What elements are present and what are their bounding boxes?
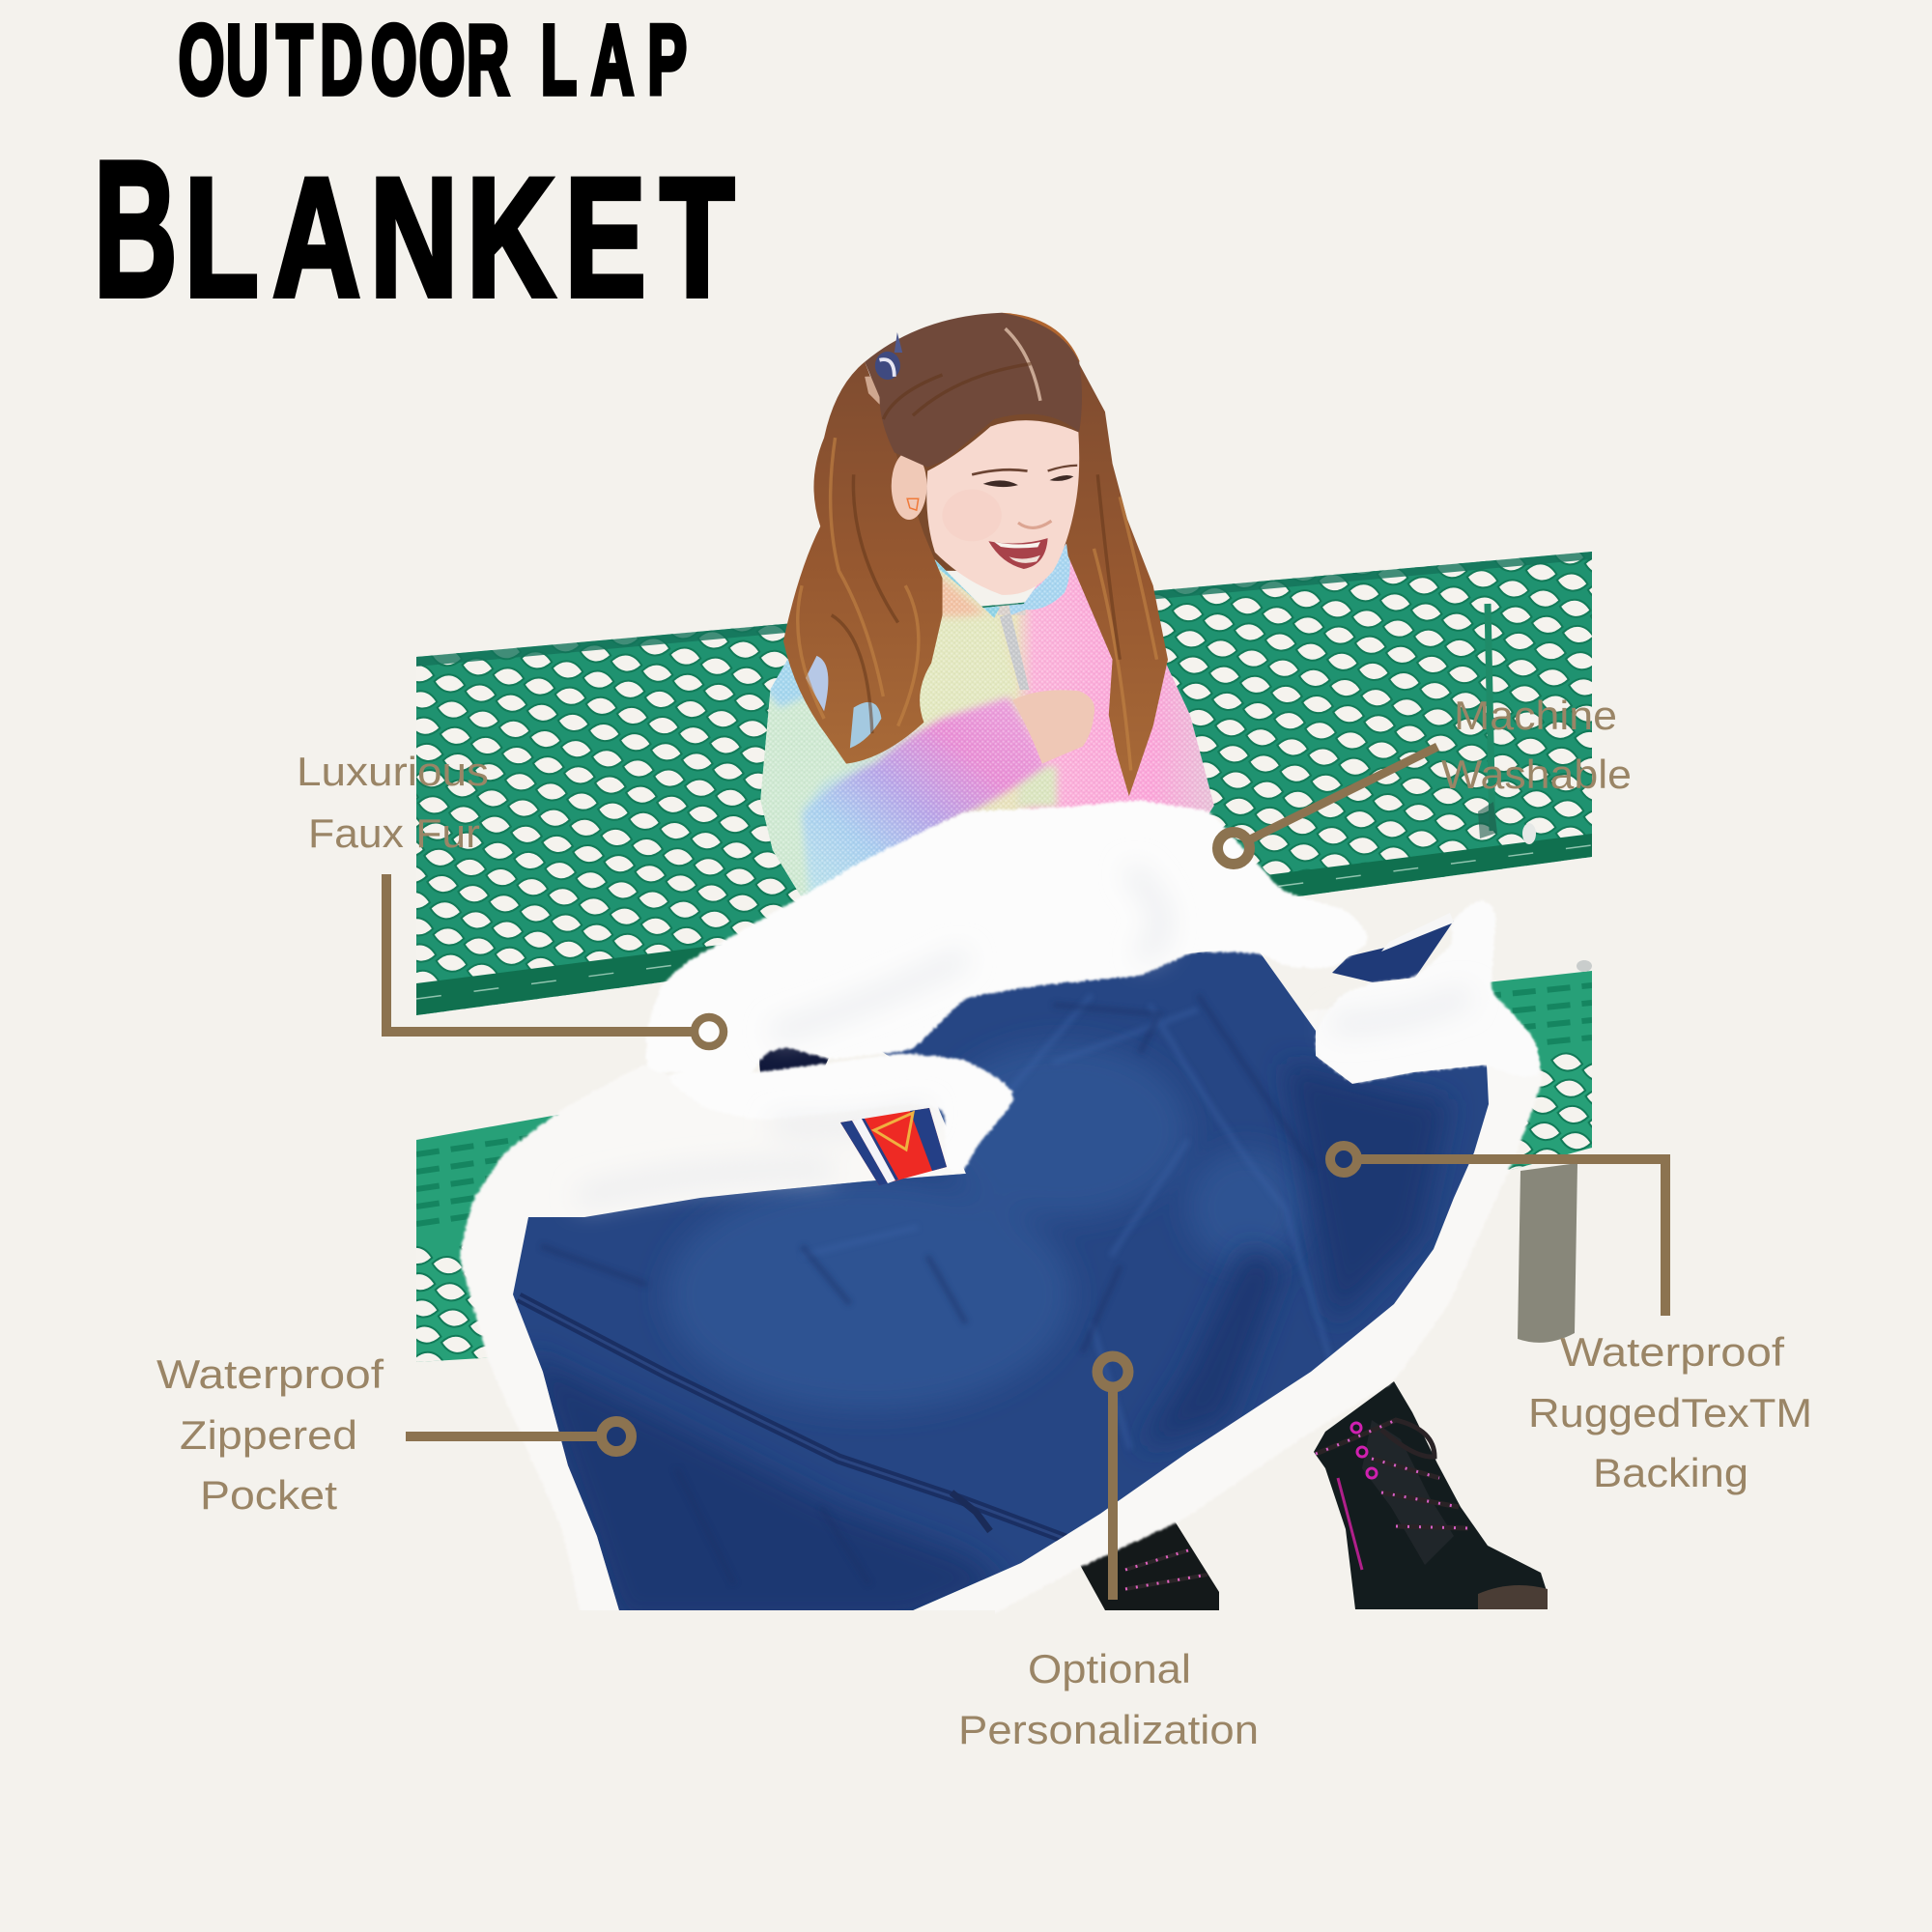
dark gap in fold <box>758 1043 829 1074</box>
title line: blanket: LANKET <box>185 144 734 332</box>
hair ponytail <box>783 362 943 764</box>
label: Zippered <box>180 1412 357 1458</box>
label <box>297 749 489 856</box>
collar peach panel <box>913 579 985 616</box>
title <box>94 5 734 336</box>
zippered pocket seam <box>519 1297 1065 1539</box>
jacket colour blends <box>751 579 1057 896</box>
callout: luxurious faux fur <box>297 749 724 1046</box>
label: Machine <box>1454 693 1617 738</box>
left boot <box>1080 1520 1219 1610</box>
upper arm blue <box>770 659 804 709</box>
label: Faux Fur <box>308 810 480 856</box>
label <box>1528 1329 1812 1495</box>
navy upper flap <box>1332 921 1454 982</box>
callout: waterproof zippered pocket <box>156 1351 632 1518</box>
under collar shirt <box>998 603 1026 615</box>
bench leg <box>1518 1163 1577 1343</box>
label: Luxurious <box>297 749 489 794</box>
hair tie <box>875 332 902 380</box>
label: Personalization <box>958 1707 1259 1752</box>
hand <box>1012 690 1094 764</box>
callout: waterproof ruggedtex backing <box>1330 1146 1812 1495</box>
label <box>156 1351 384 1518</box>
navy dark areas <box>526 1063 1449 1623</box>
label <box>1441 693 1632 797</box>
label: Optional <box>1028 1646 1191 1691</box>
hair top <box>865 313 1082 468</box>
leader line and ring <box>1097 1356 1128 1600</box>
boots <box>1080 1381 1548 1610</box>
crease shadows <box>543 997 1296 1350</box>
fur right fold <box>1316 896 1543 1084</box>
hair right side <box>1065 364 1168 796</box>
mask below blanket hem <box>570 1610 995 1626</box>
label: Washable <box>1441 752 1632 797</box>
pony skin gap <box>865 377 887 405</box>
face <box>926 420 1079 595</box>
hair part <box>1006 328 1040 401</box>
mouth <box>988 538 1048 569</box>
navy light areas <box>667 1043 1304 1410</box>
leader line and ring <box>406 1422 632 1451</box>
label <box>958 1646 1259 1752</box>
earring <box>907 498 919 510</box>
blue collar <box>1009 540 1070 615</box>
orange hair crown <box>1002 313 1080 362</box>
nose <box>1018 521 1051 527</box>
personalization tag <box>840 1108 947 1185</box>
callout: optional personalization <box>958 1356 1259 1752</box>
teal collar trim <box>935 556 1000 618</box>
navy backing <box>513 951 1489 1610</box>
jacket <box>751 534 1223 899</box>
bench with green mesh <box>416 313 1592 1604</box>
leader line and ring <box>1330 1146 1665 1316</box>
label: RuggedTexTM <box>1528 1390 1812 1435</box>
right boot <box>1314 1381 1548 1609</box>
hair base behind face <box>895 364 1079 571</box>
cheek blush <box>943 490 1002 541</box>
eyes <box>972 466 1077 487</box>
label: Waterproof <box>156 1351 384 1397</box>
label: Backing <box>1593 1450 1748 1495</box>
fur hook fold <box>657 1053 1017 1176</box>
ear <box>892 452 926 520</box>
hair strands <box>798 438 1157 771</box>
leader line and ring <box>1217 747 1437 864</box>
title line: blanket: B <box>94 121 178 336</box>
title line: outdoor lap: OUTDOOR LAP <box>179 5 687 115</box>
callout: machine washable <box>1217 693 1632 864</box>
bench seat right <box>1490 971 1592 1170</box>
lower jacket panel <box>1016 767 1057 808</box>
girl <box>751 313 1223 899</box>
blanket <box>459 800 1546 1626</box>
sleeve <box>802 687 1046 896</box>
jacket centre panel <box>913 617 1016 726</box>
label: Pocket <box>200 1472 337 1518</box>
leader line and ring <box>386 874 724 1046</box>
fur shading <box>580 869 1468 1198</box>
bench bolt <box>1577 960 1592 972</box>
fur border <box>459 1005 1543 1623</box>
jacket seen through hair <box>806 656 828 711</box>
fur sliver behind flap <box>1381 913 1454 952</box>
bench back <box>416 552 1592 1015</box>
upper arm green <box>760 692 849 895</box>
zipper <box>1000 613 1029 690</box>
sherpa texture <box>751 534 1223 899</box>
bench seat left <box>416 1115 559 1362</box>
label: Waterproof <box>1560 1329 1784 1375</box>
crease highlights <box>1049 997 1331 1447</box>
fur top fold <box>646 800 1373 1101</box>
